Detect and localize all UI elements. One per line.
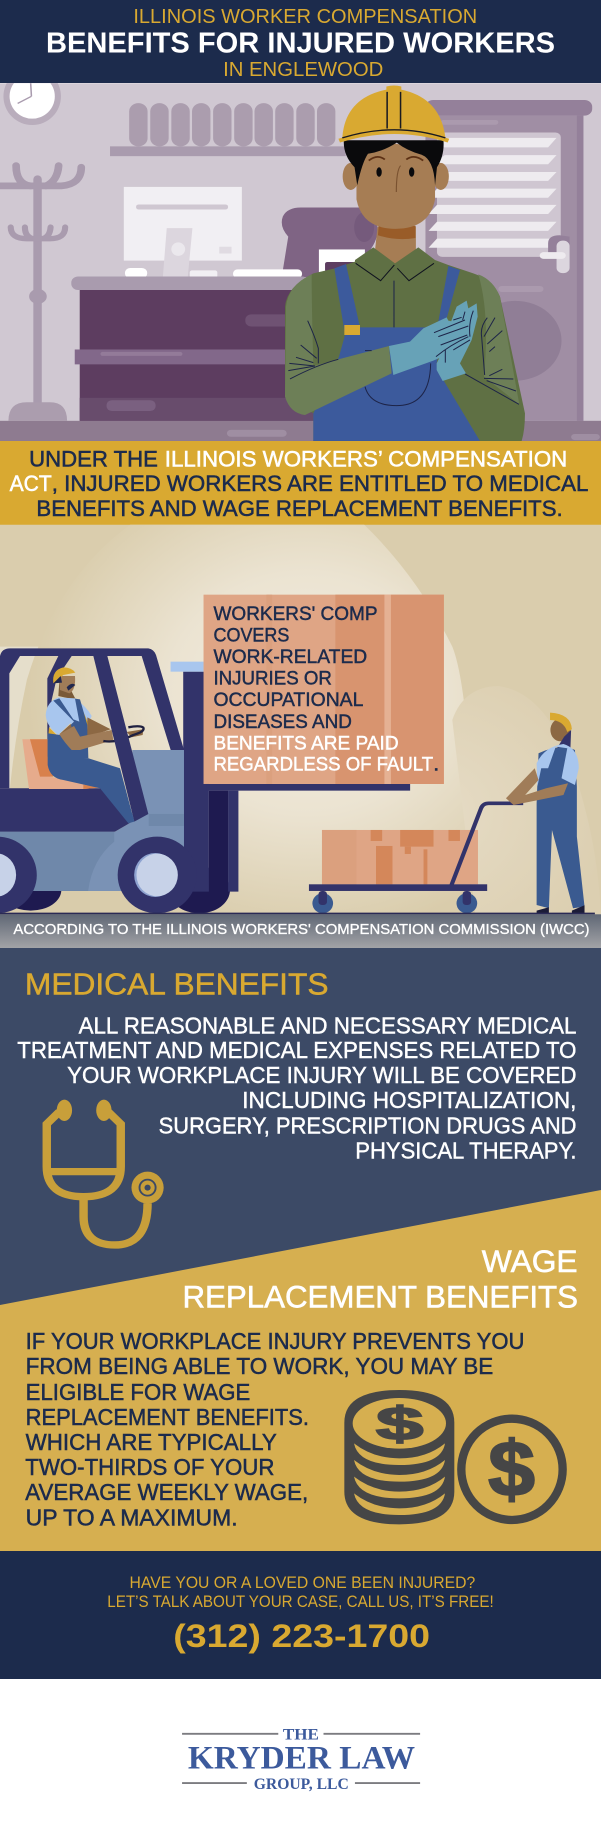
desk xyxy=(71,276,317,421)
panel: office illustration xyxy=(0,68,601,441)
cardboard box on forks xyxy=(204,595,444,784)
callout: workers comp text xyxy=(213,603,439,775)
medical benefits body text xyxy=(17,1014,576,1164)
computer monitor and desk items xyxy=(124,187,302,278)
desk chair xyxy=(282,208,378,277)
intro line 1: UNDER THE xyxy=(29,447,158,472)
callout: workers comp text: INJURIES OR xyxy=(213,668,332,689)
panel: medical benefits xyxy=(0,948,601,1308)
wage replacement body text: TWO-THIRDS OF YOUR xyxy=(25,1454,274,1480)
hard hat xyxy=(339,86,448,141)
light wedge left of arch xyxy=(0,646,38,788)
forklift xyxy=(0,648,410,913)
heading: wage replacement benefits: REPLACEMENT BENEFITS xyxy=(182,1279,578,1315)
callout: workers comp text: DISEASES AND xyxy=(213,711,352,733)
rear strut xyxy=(47,656,72,740)
wage replacement body text: REPLACEMENT BENEFITS. xyxy=(26,1404,309,1430)
header banner xyxy=(0,0,601,83)
overalls xyxy=(313,264,480,441)
floor xyxy=(0,421,601,441)
collar lines xyxy=(356,263,434,281)
chair bulge xyxy=(354,212,374,242)
callout: workers comp text: WORK-RELATED xyxy=(213,646,367,668)
hair xyxy=(344,140,444,185)
title: kicker: ILLINOIS WORKER COMPENSATION xyxy=(133,4,477,28)
icon: dollar coin: $ xyxy=(488,1424,535,1512)
phone number: (312) 223-1700 xyxy=(173,1617,430,1654)
logo: The Kryder Law Group, LLC xyxy=(182,1727,420,1793)
wheels xyxy=(0,837,37,913)
logo: The Kryder Law Group, LLC: KRYDER LAW xyxy=(188,1741,415,1777)
panel: warehouse forklift scene xyxy=(0,525,601,915)
worker head with hard hat xyxy=(339,86,449,267)
cab frame xyxy=(0,648,184,822)
call to action text xyxy=(107,1574,494,1611)
title: location: IN ENGLEWOOD xyxy=(223,57,383,81)
driver xyxy=(46,667,144,823)
icon: stethoscope xyxy=(47,1100,164,1245)
ears xyxy=(343,163,449,190)
wage replacement body text: ELIGIBLE FOR WAGE xyxy=(26,1379,250,1405)
warehouse worker pushing cart xyxy=(506,713,585,913)
neck xyxy=(354,226,416,264)
coat rack xyxy=(0,166,81,421)
wage replacement body text xyxy=(25,1328,524,1530)
mast xyxy=(209,791,228,892)
hand cart with boxes xyxy=(309,803,523,913)
lighter sleeves xyxy=(285,274,519,415)
icon: coin stack: $ xyxy=(376,1397,423,1449)
heading: wage replacement benefits: WAGE xyxy=(482,1243,578,1279)
callout: workers comp text: . xyxy=(433,754,439,775)
cab, seat and driver xyxy=(0,648,184,823)
icon: coin stack xyxy=(344,1390,454,1524)
heading: wage replacement benefits xyxy=(182,1243,578,1315)
logo: The Kryder Law Group, LLC: GROUP, LLC xyxy=(254,1776,349,1793)
wage replacement body text: FROM BEING ABLE TO WORK, YOU MAY BE xyxy=(26,1354,493,1379)
logo: The Kryder Law Group, LLC: THE xyxy=(283,1727,319,1743)
cab lower xyxy=(0,788,132,832)
source bar xyxy=(0,913,601,948)
call to action text: HAVE YOU OR A LOVED ONE BEEN INJURED? xyxy=(130,1574,475,1592)
gloves xyxy=(389,301,478,381)
wage replacement body text: WHICH ARE TYPICALLY xyxy=(26,1429,277,1455)
wage replacement body text: AVERAGE WEEKLY WAGE, xyxy=(25,1479,308,1505)
worker torso, overalls and gloves xyxy=(285,247,525,441)
shelf with binders xyxy=(110,103,346,156)
callout: workers comp text: COVERS xyxy=(213,625,289,646)
shirt and finger lines xyxy=(288,281,519,406)
body xyxy=(0,750,184,891)
wage replacement body text: UP TO A MAXIMUM. xyxy=(26,1505,238,1530)
neck shadow xyxy=(378,226,415,239)
background hump xyxy=(452,693,561,912)
shirt xyxy=(285,247,525,441)
title: main heading: BENEFITS FOR INJURED WORKERS xyxy=(46,28,555,59)
door and window blinds xyxy=(425,100,592,421)
panel: call to action xyxy=(0,1551,601,1679)
callout: workers comp text: WORKERS' COMP xyxy=(213,603,378,625)
callout: workers comp text: OCCUPATIONAL xyxy=(213,689,363,711)
seat xyxy=(22,739,100,789)
gold intro band xyxy=(0,441,601,525)
call to action text: LET’S TALK ABOUT YOUR CASE, CALL US, IT’S FREE! xyxy=(107,1593,494,1611)
background arch xyxy=(4,525,475,915)
panel: wage replacement benefits xyxy=(0,1190,601,1551)
callout: workers comp text: BENEFITS ARE PAID xyxy=(213,733,399,754)
wage replacement body text: IF YOUR WORKPLACE INJURY PREVENTS YOU xyxy=(26,1328,524,1354)
callout: workers comp text: REGARDLESS OF FAULT xyxy=(213,754,433,775)
wall clock xyxy=(4,83,61,125)
eyes and nose xyxy=(369,157,423,192)
heading: medical benefits: MEDICAL BENEFITS xyxy=(25,967,328,1002)
rear wheel shadow xyxy=(16,891,62,911)
intro line 2: ACT xyxy=(10,471,52,497)
face xyxy=(356,144,435,229)
buckle xyxy=(344,325,360,335)
icon: dollar coin xyxy=(461,1419,563,1520)
